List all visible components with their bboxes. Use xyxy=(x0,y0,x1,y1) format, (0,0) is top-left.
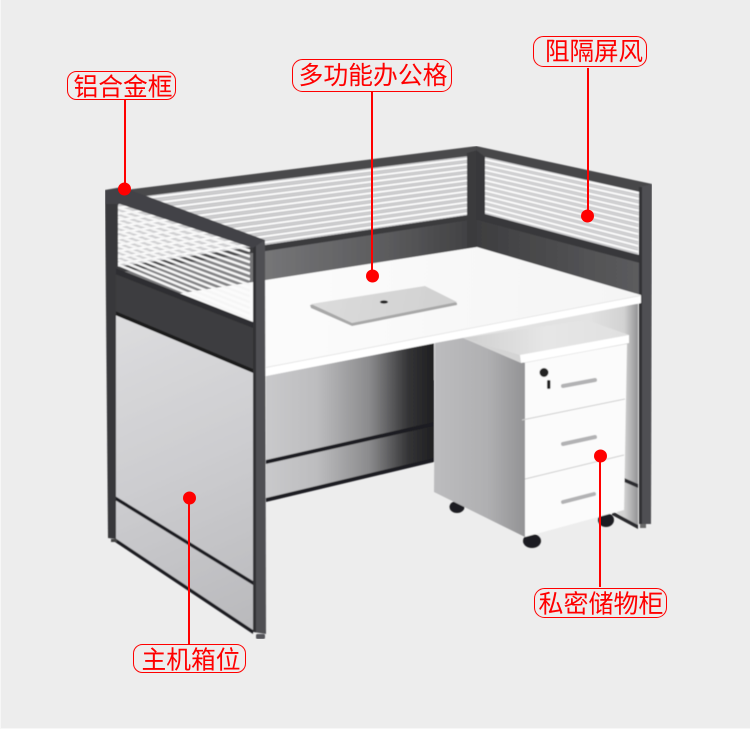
back screen glass xyxy=(115,156,467,267)
left side panel / computer bay xyxy=(111,315,265,639)
left frame posts and top rail xyxy=(105,187,266,634)
right leg panel under desk xyxy=(434,300,638,529)
cabinet top xyxy=(463,320,629,355)
drawer handles xyxy=(563,380,595,502)
right post xyxy=(639,184,652,528)
label: 多功能办公格: 多功能办公格 xyxy=(298,62,448,90)
leader: aluminium frame xyxy=(118,100,131,196)
back frame and lower back panel xyxy=(115,146,478,304)
lock and key xyxy=(540,368,550,389)
leader: privacy screen xyxy=(581,68,594,222)
label: 私密储物柜: 私密储物柜 xyxy=(538,590,664,618)
label: 阻隔屏风: 阻隔屏风 xyxy=(545,38,643,66)
left screen glass overlay xyxy=(115,203,251,294)
label: 主机箱位: 主机箱位 xyxy=(142,646,240,674)
leader: private storage cabinet xyxy=(594,450,607,587)
right screen glass xyxy=(485,157,639,255)
desk illustration xyxy=(105,146,652,639)
right frame and lower right panel xyxy=(476,146,652,295)
leader: multifunction desk xyxy=(366,92,379,282)
pedestal cabinet xyxy=(434,320,629,548)
laptop xyxy=(310,286,457,326)
cabinet side xyxy=(434,338,525,537)
desktop xyxy=(118,247,641,376)
wheels xyxy=(450,501,614,548)
left dark band xyxy=(115,268,253,373)
cabinet front xyxy=(525,344,627,537)
under-desk modesty panel xyxy=(266,340,434,502)
leader: computer bay xyxy=(183,492,196,644)
label: 铝合金框: 铝合金框 xyxy=(74,74,172,102)
